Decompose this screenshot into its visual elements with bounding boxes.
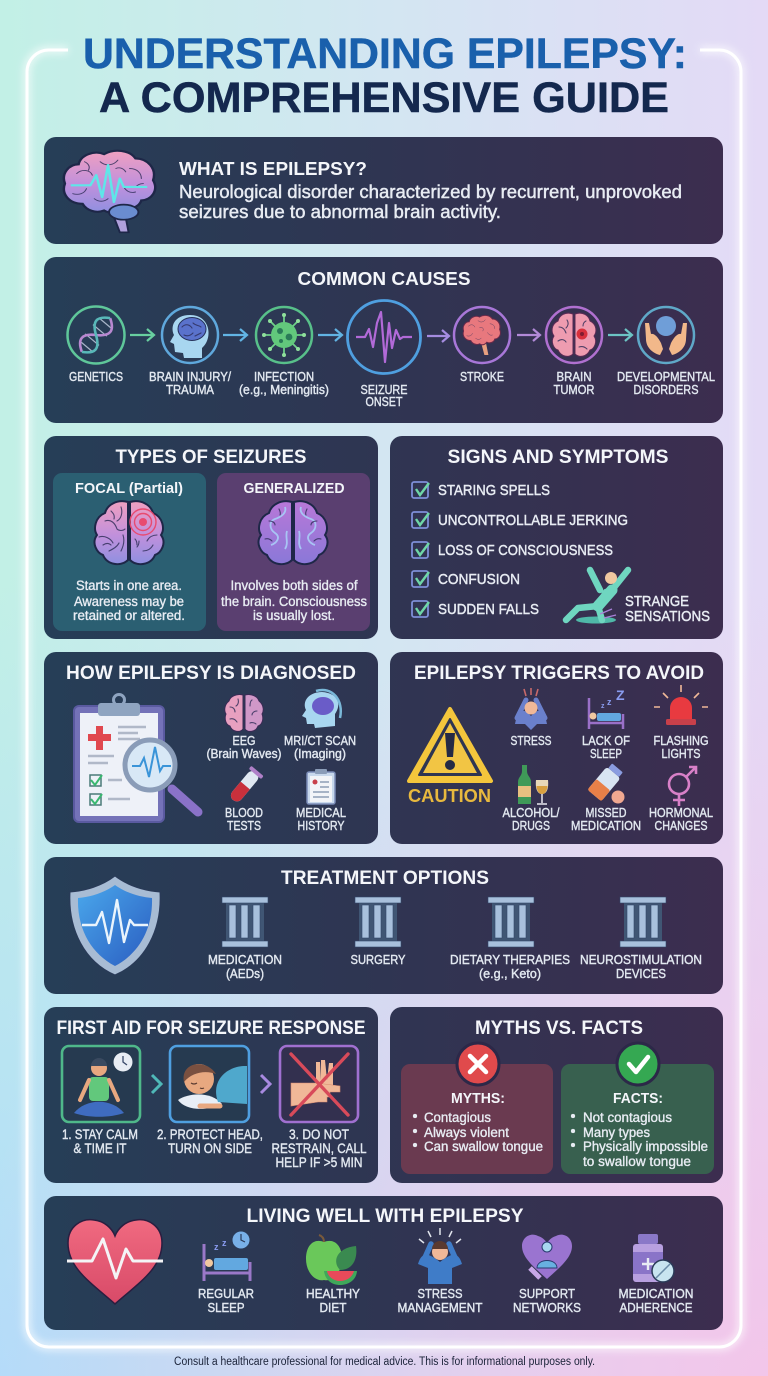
- trigger: flashing lights: FLASHING: [654, 734, 708, 748]
- item: support networks: SUPPORT: [519, 1287, 575, 1301]
- card: facts: Many types: [583, 1125, 650, 1140]
- trigger: missed medication: [571, 762, 641, 833]
- heading: signs and symptoms: SIGNS AND SYMPTOMS: [448, 447, 668, 468]
- step labels: 2. PROTECT HEAD,: [157, 1127, 263, 1142]
- arrow: [223, 329, 247, 341]
- trigger: flashing lights: LIGHTS: [662, 747, 700, 761]
- panel: what is epilepsy: [44, 137, 723, 244]
- panel: living well: [44, 1196, 723, 1330]
- title: A COMPREHENSIVE GUIDE: [99, 74, 669, 122]
- heading: living well: LIVING WELL WITH EPILEPSY: [246, 1206, 524, 1227]
- card: generalized: [217, 473, 370, 631]
- card: myths: Can swallow tongue: [424, 1139, 543, 1154]
- trigger: alcohol: ALCOHOL/: [502, 806, 560, 820]
- cause labels: SEIZURE: [360, 383, 408, 397]
- panel: signs and symptoms: [390, 436, 723, 639]
- heading: what is epilepsy: WHAT IS EPILEPSY?: [179, 159, 367, 179]
- item: EEG: [206, 694, 282, 761]
- panel: triggers to avoid: [390, 652, 723, 844]
- item: healthy diet: [306, 1235, 361, 1315]
- card: facts: Not contagious: [583, 1110, 672, 1125]
- strange sensations label: [625, 593, 710, 625]
- step labels: & TIME IT: [74, 1141, 126, 1156]
- icon: brain tumor: [546, 307, 602, 363]
- item: regular sleep: SLEEP: [208, 1301, 244, 1315]
- trigger: hormonal changes: [649, 767, 713, 833]
- card: focal: [53, 473, 206, 631]
- treatment: neurostimulation devices: [580, 897, 702, 981]
- item: healthy diet: HEALTHY: [306, 1287, 361, 1301]
- strange sensations label: SENSATIONS: [625, 608, 710, 625]
- icon: caution sign: [408, 709, 491, 806]
- icon: heart with pulse: [67, 1220, 163, 1304]
- cause labels: TRAUMA: [166, 383, 215, 397]
- treatment: dietary therapies: DIETARY THERAPIES: [450, 953, 570, 967]
- item: medical history: HISTORY: [298, 819, 345, 833]
- item: blood tests: BLOOD: [225, 806, 263, 820]
- panel: first aid: [44, 1007, 378, 1183]
- item: regular sleep: REGULAR: [198, 1287, 254, 1301]
- item: healthy diet: DIET: [320, 1301, 347, 1315]
- arrow: [427, 330, 449, 342]
- trigger: lack of sleep: SLEEP: [590, 747, 622, 761]
- item: medical history: [296, 769, 346, 833]
- step labels: [62, 1127, 367, 1170]
- checklist: LOSS OF CONSCIOUSNESS: [438, 542, 613, 559]
- panel: how epilepsy is diagnosed: [44, 652, 378, 844]
- trigger: missed medication: MISSED: [586, 806, 626, 820]
- card: focal: retained or altered.: [73, 608, 185, 623]
- icon: stroke: [454, 307, 510, 363]
- cause labels: DEVELOPMENTAL: [617, 370, 715, 384]
- step 2: [170, 1046, 249, 1122]
- arrow: [318, 329, 342, 341]
- treatment: dietary therapies: (e.g., Keto): [479, 967, 541, 981]
- item: regular sleep: [198, 1231, 254, 1315]
- item: blood tests: [225, 766, 264, 833]
- step labels: 3. DO NOT: [289, 1127, 349, 1142]
- card: facts: to swallow tongue: [583, 1154, 691, 1169]
- item: blood tests: TESTS: [227, 819, 261, 833]
- step labels: RESTRAIN, CALL: [272, 1141, 367, 1156]
- step 3: [280, 1046, 358, 1122]
- treatment: medication: [208, 897, 282, 981]
- trigger: hormonal changes: CHANGES: [654, 819, 708, 833]
- card: focal: FOCAL (Partial): [75, 480, 183, 497]
- panel: myths vs facts: [390, 1007, 723, 1183]
- item: MRI: (Imaging): [294, 747, 346, 761]
- card: generalized: is usually lost.: [253, 608, 335, 623]
- footer disclaimer: Consult a healthcare professional for medical advice. This is for informational purposes only.: [174, 1356, 595, 1368]
- treatment: neurostimulation devices: NEUROSTIMULATION: [580, 953, 702, 967]
- heading: first aid: FIRST AID FOR SEIZURE RESPONSE: [56, 1018, 366, 1039]
- card: generalized: the brain. Consciousness: [221, 594, 367, 609]
- panel: treatment options: [44, 857, 723, 994]
- panel: common causes: [44, 257, 723, 423]
- definition text: [179, 182, 682, 222]
- heading: common causes: COMMON CAUSES: [298, 268, 470, 289]
- card: facts: FACTS:: [613, 1090, 663, 1107]
- treatment: medication: (AEDs): [226, 967, 264, 981]
- treatment: medication: MEDICATION: [208, 953, 282, 967]
- card: generalized: Involves both sides of: [230, 578, 358, 593]
- item: MRI: MRI/CT SCAN: [284, 734, 356, 748]
- treatment: surgery: [350, 897, 406, 967]
- item: medication adherence: [618, 1234, 694, 1315]
- icon: brain injury: [162, 307, 218, 363]
- trigger: flashing lights: [654, 685, 708, 761]
- trigger: alcohol: DRUGS: [512, 819, 550, 833]
- arrow: [130, 329, 154, 341]
- icon: clipboard with magnifier: [74, 694, 198, 822]
- item: EEG: EEG: [232, 734, 256, 748]
- heading: myths vs facts: MYTHS VS. FACTS: [475, 1018, 643, 1039]
- item: medication adherence: ADHERENCE: [620, 1301, 692, 1315]
- checklist: CONFUSION: [438, 571, 520, 588]
- item: MRI: [284, 690, 356, 761]
- icon: caution sign: CAUTION: [408, 786, 491, 806]
- icon: genetics: [68, 306, 124, 364]
- icon: shield: [70, 876, 160, 975]
- item: stress management: [398, 1228, 483, 1315]
- definition text: Neurological disorder characterized by recurrent, unprovoked: [179, 182, 682, 202]
- step labels: HELP IF >5 MIN: [276, 1155, 362, 1170]
- trigger: lack of sleep: LACK OF: [582, 734, 630, 748]
- heading: types of seizures: TYPES OF SEIZURES: [116, 447, 306, 468]
- cause labels: [69, 370, 715, 409]
- treatment: neurostimulation devices: DEVICES: [616, 967, 666, 981]
- cause labels: ONSET: [366, 395, 403, 409]
- arrow: [608, 329, 632, 341]
- icon: developmental disorders: [638, 307, 694, 363]
- chevron: [152, 1075, 161, 1093]
- step labels: 1. STAY CALM: [62, 1127, 138, 1142]
- heading: diagnosis: HOW EPILEPSY IS DIAGNOSED: [66, 663, 356, 684]
- icon: brain with wave: [64, 151, 155, 232]
- cause labels: GENETICS: [69, 370, 123, 384]
- card: myths: Always violent: [424, 1125, 509, 1140]
- heading: triggers: EPILEPSY TRIGGERS TO AVOID: [414, 663, 704, 684]
- item: support networks: NETWORKS: [513, 1301, 581, 1315]
- treatment: dietary therapies: [450, 897, 570, 981]
- checklist: STARING SPELLS: [438, 482, 550, 499]
- step labels: TURN ON SIDE: [168, 1141, 252, 1156]
- trigger: stress: STRESS: [510, 734, 552, 748]
- treatment: surgery: SURGERY: [350, 953, 406, 967]
- chevron: [261, 1075, 270, 1093]
- card: facts: [561, 1043, 714, 1174]
- card: focal: Starts in one area.: [76, 578, 182, 593]
- item: support networks: [513, 1235, 581, 1315]
- trigger: alcohol: [502, 765, 560, 833]
- card: myths: [401, 1043, 553, 1174]
- trigger: lack of sleep: [582, 687, 630, 761]
- trigger: hormonal changes: HORMONAL: [649, 806, 713, 820]
- trigger: stress: [510, 688, 552, 748]
- item: medical history: MEDICAL: [296, 806, 346, 820]
- card: generalized: GENERALIZED: [244, 480, 345, 497]
- item: medication adherence: MEDICATION: [618, 1287, 694, 1301]
- cause labels: BRAIN: [556, 370, 592, 384]
- icon: infection: [256, 307, 312, 363]
- cause labels: TUMOR: [554, 383, 594, 397]
- card: focal: Awareness may be: [74, 594, 184, 609]
- panel: types of seizures: [44, 436, 378, 639]
- item: EEG: (Brain Waves): [206, 747, 282, 761]
- title: [83, 30, 687, 122]
- cause labels: (e.g., Meningitis): [239, 383, 329, 397]
- item: stress management: MANAGEMENT: [398, 1301, 483, 1315]
- cause labels: DISORDERS: [634, 383, 698, 397]
- step 1: [62, 1046, 140, 1122]
- arrow: [517, 329, 540, 341]
- definition text: seizures due to abnormal brain activity.: [179, 202, 501, 222]
- icon: falling person: [566, 570, 628, 624]
- icon: seizure onset: [348, 300, 420, 374]
- cause labels: STROKE: [460, 370, 504, 384]
- strange sensations label: STRANGE: [625, 593, 689, 610]
- trigger: lack of sleep: z: [607, 697, 612, 707]
- item: regular sleep: z: [222, 1238, 227, 1248]
- trigger: lack of sleep: Z: [616, 687, 625, 703]
- checklist: SUDDEN FALLS: [438, 601, 539, 618]
- trigger: lack of sleep: z: [601, 703, 605, 710]
- card: myths: MYTHS:: [451, 1090, 505, 1107]
- cause labels: BRAIN INJURY/: [149, 370, 231, 384]
- checklist: UNCONTROLLABLE JERKING: [438, 512, 628, 529]
- card: facts: Physically impossible: [583, 1139, 708, 1154]
- title: UNDERSTANDING EPILEPSY:: [83, 30, 687, 78]
- heading: treatment: TREATMENT OPTIONS: [281, 868, 489, 889]
- item: stress management: STRESS: [418, 1287, 462, 1301]
- item: regular sleep: z: [214, 1242, 219, 1252]
- checklist: [412, 482, 628, 618]
- card: myths: Contagious: [424, 1110, 491, 1125]
- cause labels: INFECTION: [254, 370, 314, 384]
- trigger: missed medication: MEDICATION: [571, 819, 641, 833]
